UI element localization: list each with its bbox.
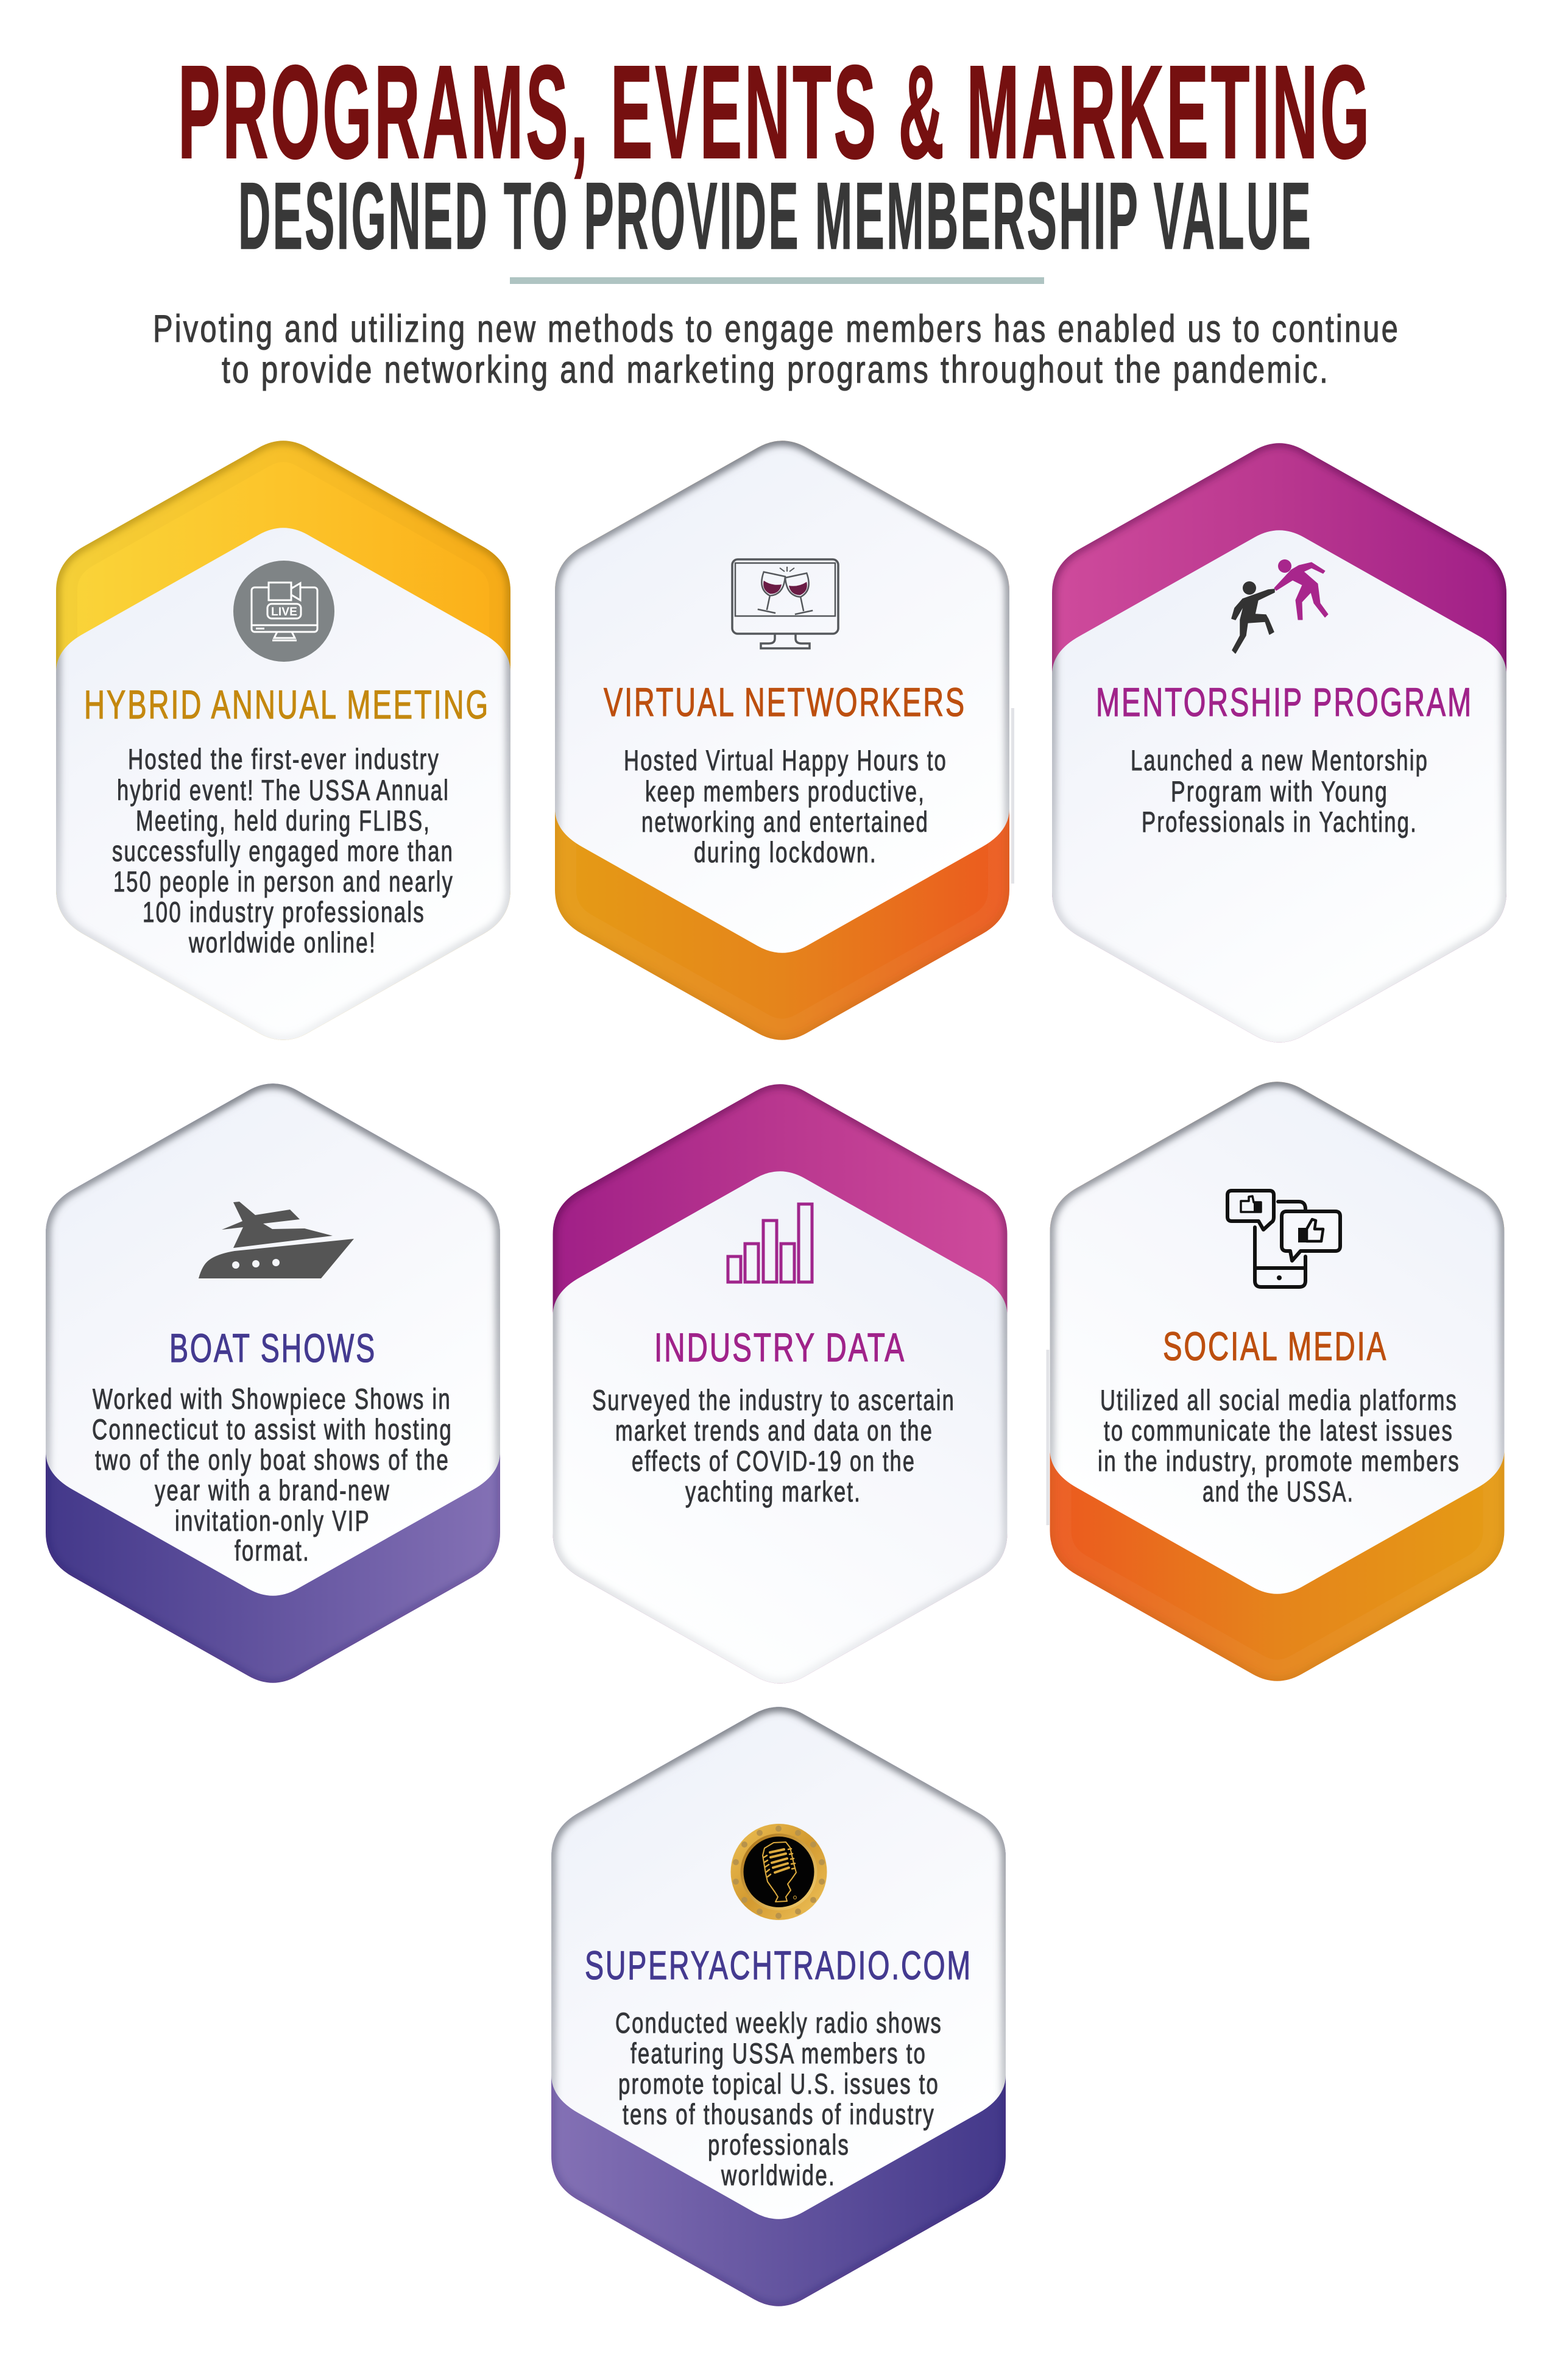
heading: VIRTUAL NETWORKERS	[604, 679, 966, 725]
divider bar	[510, 277, 1044, 284]
hexagon background with yellow top band	[56, 441, 510, 1040]
body text: and the USSA.	[1202, 1475, 1354, 1508]
heading: SOCIAL MEDIA	[1163, 1324, 1388, 1369]
icon: small like bubble	[1227, 1191, 1274, 1230]
heading: INDUSTRY DATA	[654, 1325, 906, 1370]
icon: left wine glass	[755, 572, 786, 614]
icon: bar chart	[728, 1204, 812, 1282]
icon: climbing person	[1232, 581, 1274, 653]
icon: mentor helping person climb	[1232, 559, 1328, 653]
panel: superyachtradio.com	[551, 1707, 1006, 2306]
panel: boat shows	[46, 1083, 500, 1683]
panel: hybrid annual meeting	[56, 441, 510, 1040]
hexagon background with purple bottom band	[551, 1707, 1006, 2306]
heading: BOAT SHOWS	[169, 1325, 376, 1370]
body text: professionals	[708, 2128, 850, 2161]
body text: promote topical U.S. issues to	[618, 2068, 939, 2100]
body text	[1131, 744, 1429, 838]
heading: HYBRID ANNUAL MEETING	[84, 682, 490, 727]
icon: live stream monitor	[233, 561, 334, 662]
icon: large like bubble	[1282, 1211, 1340, 1261]
icon: right wine glass	[785, 573, 815, 615]
icon: yacht	[199, 1202, 354, 1278]
body text: format.	[235, 1534, 310, 1567]
body text: worldwide online!	[188, 926, 376, 959]
body text: 150 people in person and nearly	[113, 865, 454, 898]
body text: Launched a new Mentorship	[1131, 744, 1429, 776]
hexagon background with magenta top band	[553, 1084, 1008, 1684]
hexagon background with orange bottom band	[555, 441, 1014, 1040]
intro text	[153, 308, 1400, 391]
body text: featuring USSA members to	[630, 2037, 927, 2069]
heading: SUPERYACHTRADIO.COM	[585, 1943, 972, 1988]
body text: Hosted the first-ever industry	[128, 743, 440, 775]
body text: year with a brand-new	[155, 1474, 390, 1506]
body text: Worked with Showpiece Shows in	[93, 1383, 451, 1415]
body text: effects of COVID-19 on the	[632, 1445, 916, 1477]
body text: two of the only boat shows of the	[95, 1444, 450, 1476]
body text: worldwide.	[721, 2159, 836, 2191]
body text: Conducted weekly radio shows	[615, 2007, 942, 2039]
body text: keep members productive,	[645, 775, 925, 807]
body text: successfully engaged more than	[112, 835, 454, 867]
body text: 100 industry professionals	[143, 896, 425, 928]
panel: virtual networkers	[555, 441, 1014, 1040]
body text: market trends and data on the	[615, 1414, 933, 1447]
body text: tens of thousands of industry	[623, 2098, 935, 2130]
hexagon background with purple bottom band	[46, 1083, 500, 1683]
icon: gold porthole microphone logo	[731, 1824, 827, 1920]
icon: phone with like bubbles	[1227, 1191, 1340, 1287]
body text	[624, 744, 947, 868]
panel: mentorship program	[1052, 443, 1506, 1043]
body text: hybrid event! The USSA Annual	[117, 774, 450, 806]
body text	[92, 1383, 453, 1567]
panel: social media	[1047, 1082, 1505, 1681]
icon: live stream monitor: LIVE	[271, 606, 297, 618]
body text	[615, 2007, 942, 2191]
panel: industry data	[553, 1084, 1008, 1684]
body text: Program with Young	[1171, 775, 1388, 807]
body text: Hosted Virtual Happy Hours to	[624, 744, 947, 776]
icon: helping person	[1274, 559, 1328, 620]
body text: invitation-only VIP	[175, 1504, 370, 1537]
hexagon background with magenta top band	[1052, 443, 1506, 1043]
body text: in the industry, promote members	[1098, 1445, 1460, 1477]
body text	[112, 743, 454, 959]
hexagon background with orange bottom band	[1047, 1082, 1505, 1681]
body text: during lockdown.	[694, 836, 877, 868]
body text: Meeting, held during FLIBS,	[136, 804, 431, 837]
body text	[592, 1384, 955, 1508]
body text: to communicate the latest issues	[1104, 1414, 1453, 1447]
body text: yachting market.	[685, 1475, 861, 1508]
body text	[1098, 1384, 1460, 1508]
icon: monitor with wine glasses	[732, 559, 838, 648]
body text: Professionals in Yachting.	[1142, 806, 1418, 838]
body text: Connecticut to assist with hosting	[92, 1413, 453, 1445]
body text: networking and entertained	[641, 806, 929, 838]
body text: Surveyed the industry to ascertain	[592, 1384, 955, 1416]
